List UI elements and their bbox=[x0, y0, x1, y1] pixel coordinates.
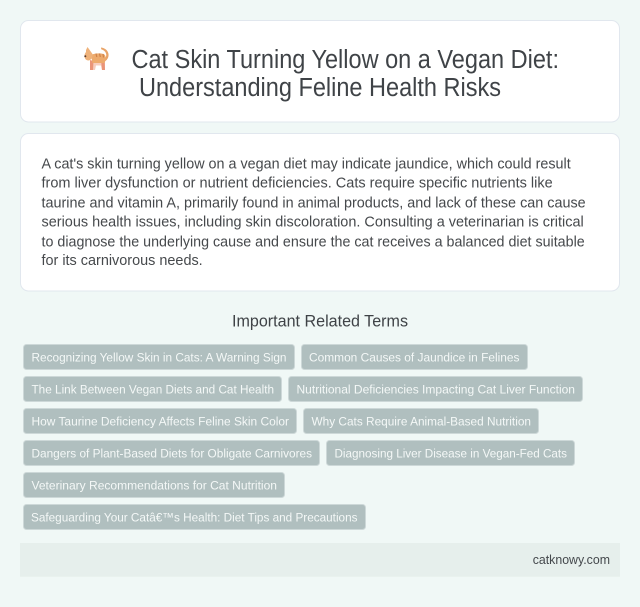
summary line 3: taurine and vitamin A, primarily found in animal products, and lack of these can cause bbox=[42, 195, 586, 211]
tag 8: Diagnosing Liver Disease in Vegan-Fed Cats bbox=[334, 446, 567, 460]
tag 6 bbox=[304, 408, 538, 434]
tag 9: Veterinary Recommendations for Cat Nutrition bbox=[32, 478, 277, 492]
tag 8 bbox=[326, 440, 574, 466]
summary line 2: from liver dysfunction or nutrient deficiencies. Cats require specific nutrients like bbox=[42, 176, 553, 192]
tag 3 bbox=[24, 376, 282, 402]
tag 3: The Link Between Vegan Diets and Cat Health bbox=[32, 382, 274, 396]
summary line 1: A cat's skin turning yellow on a vegan diet may indicate jaundice, which could result bbox=[42, 156, 571, 172]
tag 1: Recognizing Yellow Skin in Cats: A Warning Sign bbox=[32, 350, 287, 364]
tag 7 bbox=[24, 440, 320, 466]
footer site name: catknowy.com bbox=[533, 552, 610, 567]
tag 5 bbox=[24, 408, 296, 434]
panel: title card bbox=[20, 20, 620, 122]
tag 7: Dangers of Plant-Based Diets for Obligate Carnivores bbox=[32, 446, 312, 460]
tag 10: Safeguarding Your Catâ€™s Health: Diet Tips and Precautions bbox=[31, 510, 358, 524]
tag 10 bbox=[24, 504, 366, 530]
tag 2 bbox=[302, 344, 528, 370]
tag 9 bbox=[24, 472, 284, 498]
title line 1: Cat Skin Turning Yellow on a Vegan Diet: bbox=[132, 46, 559, 74]
tag 1 bbox=[24, 344, 294, 370]
summary line 4: serious health issues, including skin discoloration. Consulting a veterinarian is critical bbox=[42, 215, 584, 231]
tag 5: How Taurine Deficiency Affects Feline Skin Color bbox=[32, 414, 289, 428]
summary line 5: to diagnose the underlying cause and ensure the cat receives a balanced diet suitable bbox=[42, 234, 585, 250]
tag 2: Common Causes of Jaundice in Felines bbox=[309, 350, 520, 364]
panel: related terms tags bbox=[24, 344, 582, 530]
icon: cat bbox=[84, 47, 109, 70]
panel: summary text card bbox=[20, 134, 620, 291]
tag 4 bbox=[288, 376, 582, 402]
title line 2: Understanding Feline Health Risks bbox=[139, 74, 501, 102]
tag 6: Why Cats Require Animal-Based Nutrition bbox=[312, 414, 531, 428]
summary line 6: for its carnivorous needs. bbox=[42, 253, 203, 269]
footer bar bbox=[20, 543, 620, 577]
tag 4: Nutritional Deficiencies Impacting Cat Liver Function bbox=[296, 382, 575, 396]
heading: important related terms: Important Related Terms bbox=[232, 312, 408, 330]
